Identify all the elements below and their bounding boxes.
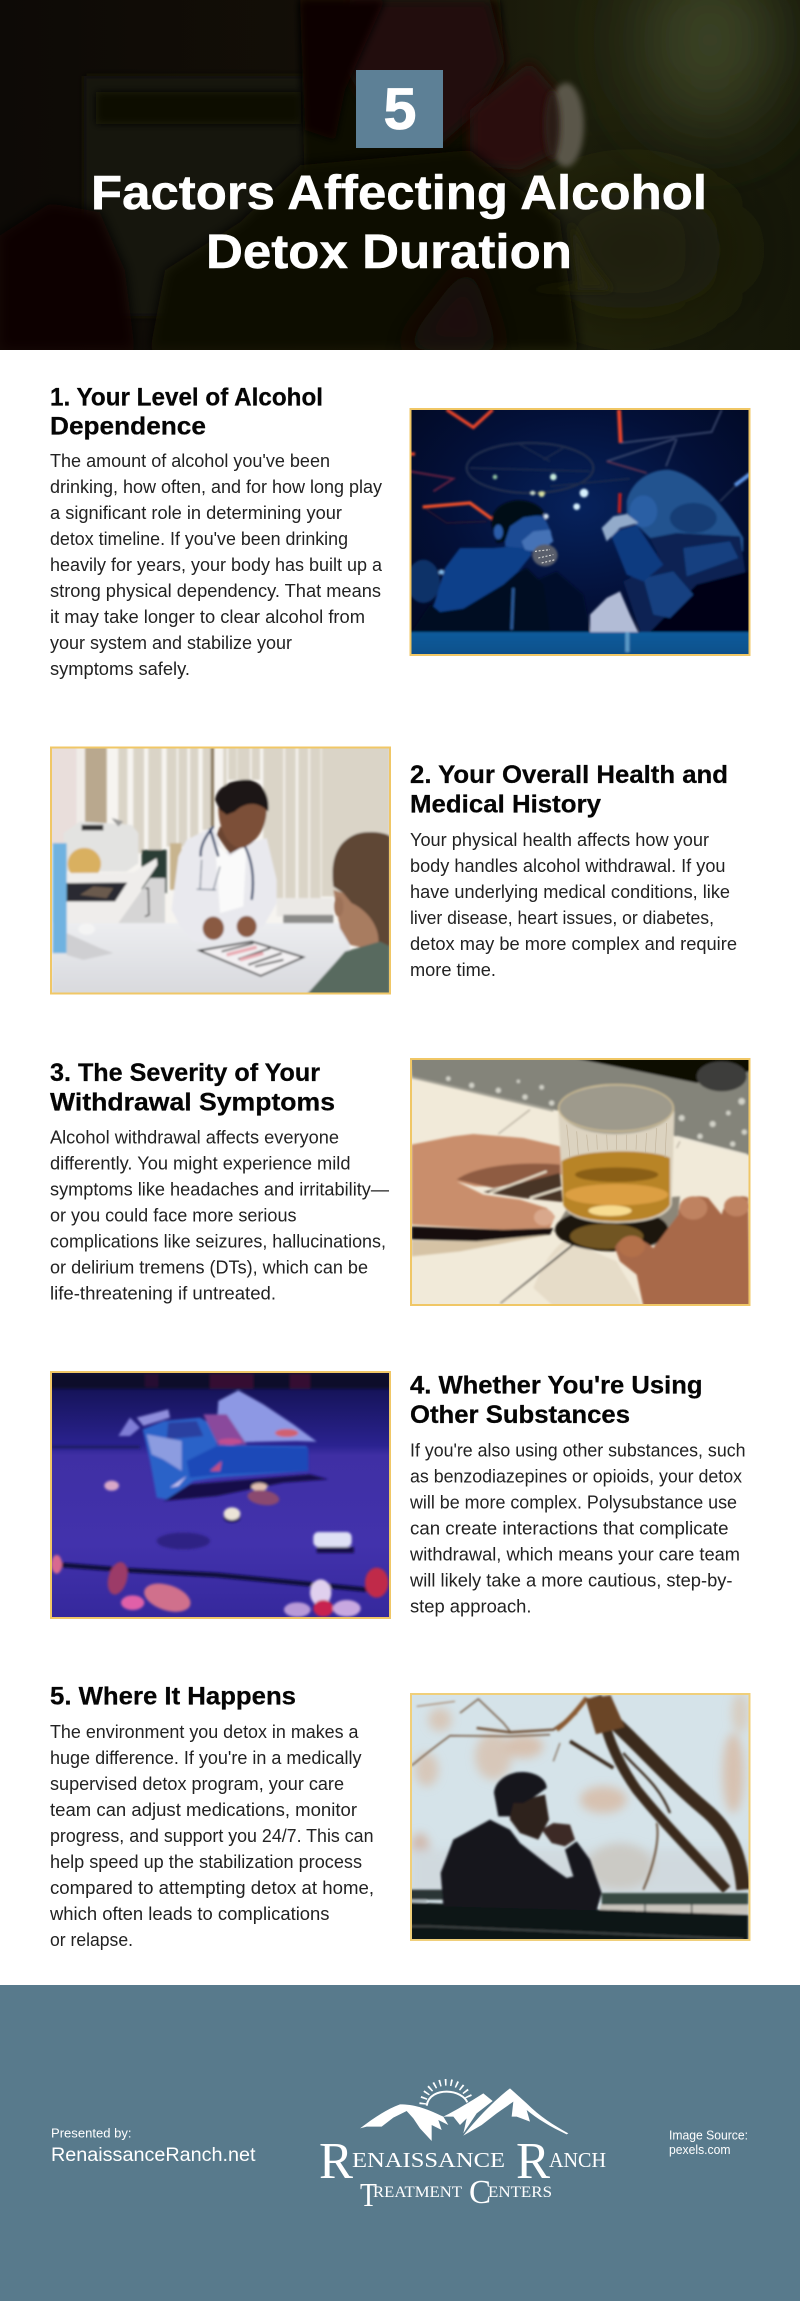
- factor 1 body text: heavily for years, your body has built up a: [50, 555, 383, 575]
- logo wordmark: R: [516, 2133, 550, 2190]
- photo: two people drinking in neon bar: [407, 408, 750, 656]
- factor 2 body text: body handles alcohol withdrawal. If you: [410, 856, 726, 876]
- factor 1 body text: The amount of alcohol you've been: [50, 451, 330, 471]
- factor 5 body text: progress, and support you 24/7. This can: [50, 1826, 374, 1846]
- hero photo: man drinking in dim bar: [0, 0, 800, 350]
- logo mountains and sun: [360, 2079, 568, 2141]
- photo: doctor with patient at desk: [50, 746, 390, 994]
- factor 5 heading: 5. Where It Happens: [50, 1682, 296, 1710]
- factor 2 heading: 2. Your Overall Health and: [410, 761, 728, 789]
- factor 3 body text: complications like seizures, hallucinations,: [50, 1232, 386, 1252]
- factor 1 body text: a significant role in determining your: [50, 503, 342, 523]
- factor 3 body text: Alcohol withdrawal affects everyone: [50, 1128, 339, 1148]
- factor 1 panel: [50, 384, 750, 679]
- factor 4 heading: [410, 1372, 702, 1429]
- factor 3 heading: Withdrawal Symptoms: [50, 1088, 335, 1116]
- factor 1 body text: detox timeline. If you've been drinking: [50, 529, 348, 549]
- factor 1 body text: drinking, how often, and for how long play: [50, 477, 382, 497]
- presented by credit: [51, 2126, 256, 2166]
- factor 5 body text: team can adjust medications, monitor: [50, 1800, 357, 1820]
- factor 2 panel: [50, 746, 737, 994]
- factor 4 body text: [409, 1440, 746, 1616]
- logo wordmark: REATMENT: [373, 2184, 463, 2201]
- factor 2 heading: Medical History: [410, 790, 601, 818]
- factor 2 body text: more time.: [410, 960, 496, 980]
- factor 5 body text: which often leads to complications: [49, 1904, 330, 1924]
- factor 2 body text: Your physical health affects how your: [410, 830, 709, 850]
- title: Detox Duration: [206, 226, 572, 279]
- factor 4 body text: If you're also using other substances, such: [410, 1440, 746, 1460]
- photo: man thinking on bench by tree: [410, 1693, 750, 1941]
- factor 2 heading: [410, 761, 728, 818]
- factor 1 body text: strong physical dependency. That means: [50, 581, 381, 601]
- title: Factors Affecting Alcohol: [91, 167, 707, 220]
- factor 5 body text: [49, 1722, 374, 1950]
- factor 4 panel: [50, 1371, 746, 1619]
- hero banner: [0, 0, 800, 350]
- photo: hands holding whisky glass: [410, 1058, 750, 1306]
- factor 4 heading: Other Substances: [410, 1401, 630, 1429]
- photo: scattered pills under purple light: [50, 1371, 390, 1619]
- factor 2 body text: detox may be more complex and require: [410, 934, 737, 954]
- logo wordmark: [319, 2133, 606, 2214]
- factor 4 body text: withdrawal, which means your care team: [409, 1544, 740, 1564]
- factor 5 body text: supervised detox program, your care: [50, 1774, 344, 1794]
- factor 5 panel: [49, 1682, 750, 1950]
- factor 3 body text: life-threatening if untreated.: [50, 1284, 276, 1304]
- factor 2 body text: have underlying medical conditions, like: [410, 882, 730, 902]
- factor 3 body text: [50, 1128, 389, 1304]
- factor 4 body text: will likely take a more cautious, step-by-: [409, 1570, 732, 1590]
- factor 4 body text: can create interactions that complicate: [410, 1518, 728, 1538]
- factor 4 body text: step approach.: [410, 1596, 532, 1616]
- presented by credit: Presented by:: [51, 2126, 132, 2140]
- factor 3 body text: or you could face more serious: [50, 1206, 296, 1226]
- factor 4 body text: as benzodiazepines or opioids, your detox: [410, 1466, 742, 1486]
- number badge: [356, 70, 443, 148]
- factor 3 body text: or delirium tremens (DTs), which can be: [50, 1258, 368, 1278]
- number badge: 5: [384, 77, 416, 142]
- factor 3 panel: [50, 1058, 750, 1306]
- image source credit: [669, 2128, 748, 2157]
- logo wordmark: ENAISSANCE: [352, 2148, 505, 2172]
- factor 3 heading: [50, 1059, 335, 1116]
- factor 2 body text: [410, 830, 737, 980]
- factor 5 body text: The environment you detox in makes a: [50, 1722, 359, 1742]
- factor 1 heading: [50, 384, 323, 440]
- factor 3 body text: symptoms like headaches and irritability—: [50, 1180, 389, 1200]
- factor 1 heading: 1. Your Level of Alcohol: [50, 384, 323, 412]
- factor 3 heading: 3. The Severity of Your: [50, 1059, 320, 1087]
- factor 3 body text: differently. You might experience mild: [50, 1154, 350, 1174]
- factor 1 body text: symptoms safely.: [50, 659, 190, 679]
- factor 1 body text: it may take longer to clear alcohol from: [50, 607, 365, 627]
- factor 5 body text: huge difference. If you're in a medically: [50, 1748, 362, 1768]
- factor 1 heading: Dependence: [50, 412, 206, 440]
- factor 1 body text: your system and stabilize your: [50, 633, 292, 653]
- image source credit: Image Source:: [669, 2128, 748, 2142]
- logo wordmark: ANCH: [549, 2148, 606, 2172]
- title: [91, 167, 707, 279]
- factor 5 body text: help speed up the stabilization process: [50, 1852, 362, 1872]
- logo wordmark: T: [360, 2177, 377, 2214]
- factor 5 body text: compared to attempting detox at home,: [50, 1878, 374, 1898]
- factor 2 body text: liver disease, heart issues, or diabetes,: [410, 908, 714, 928]
- factor 4 heading: 4. Whether You're Using: [410, 1372, 702, 1400]
- logo wordmark: ENTERS: [488, 2184, 552, 2201]
- factor 4 body text: will be more complex. Polysubstance use: [409, 1492, 737, 1512]
- logo wordmark: R: [319, 2133, 353, 2190]
- factor 5 body text: or relapse.: [50, 1930, 133, 1950]
- logo: Renaissance Ranch Treatment Centers: [319, 2082, 606, 2214]
- presented by credit: RenaissanceRanch.net: [51, 2145, 256, 2166]
- logo wordmark: C: [469, 2174, 491, 2211]
- footer band: [0, 1985, 800, 2301]
- image source credit: pexels.com: [669, 2143, 730, 2157]
- factor 1 body text: [50, 451, 383, 679]
